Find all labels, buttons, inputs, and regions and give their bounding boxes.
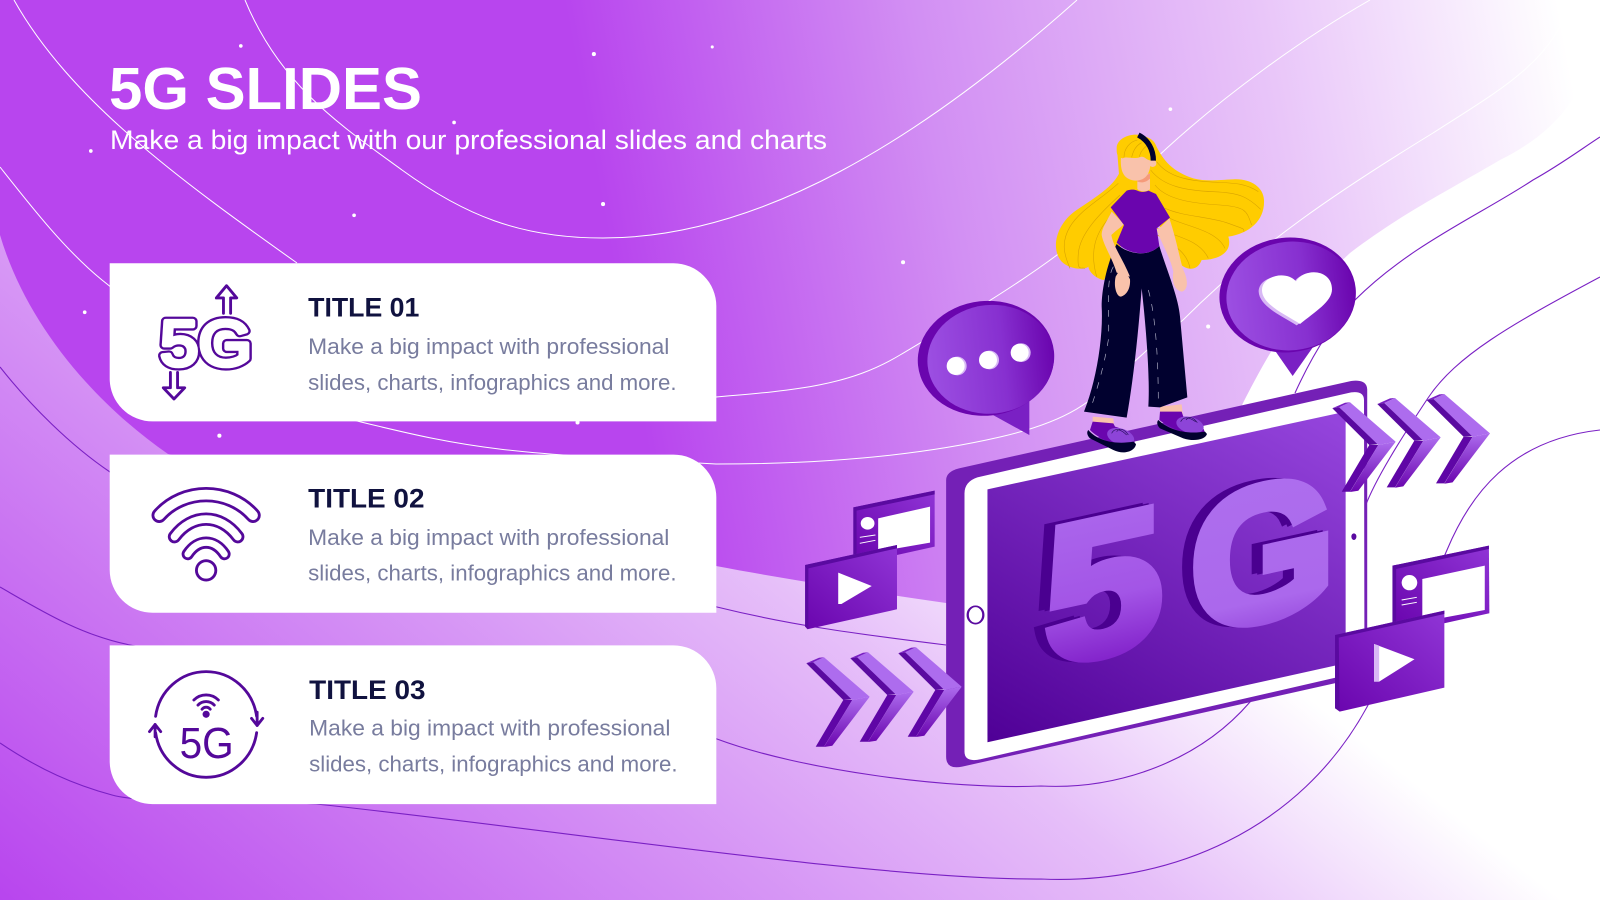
card 01 body text: Make a big impact with professional — [308, 334, 669, 359]
icon: 5G with up and down arrows — [160, 286, 252, 399]
person: long hair — [1056, 136, 1264, 280]
tablet home button — [968, 606, 983, 624]
card 01 body text: slides, charts, infographics and more. — [308, 370, 677, 395]
right back profile card — [1392, 546, 1489, 623]
background: white wave — [1150, 20, 1600, 900]
tablet screen — [987, 412, 1346, 742]
icon: 5G in cycle ring — [149, 672, 263, 777]
person: shirt — [1111, 190, 1170, 253]
arrows: right chevrons — [1332, 394, 1490, 492]
big 3D 5: 5 — [1045, 465, 1162, 708]
background: star dots — [83, 44, 1210, 438]
tablet camera dot — [1351, 533, 1356, 540]
big 3D G: G — [1190, 432, 1335, 675]
card 03 body text: Make a big impact with professional — [309, 716, 670, 741]
big 3D 5: 5 — [1034, 464, 1151, 707]
background: white contour lines — [0, 0, 1570, 464]
card 03 body text: slides, charts, infographics and more. — [309, 751, 678, 776]
tablet body — [946, 381, 1367, 767]
title: 5G SLIDES — [109, 56, 422, 122]
icon: 5G with up and down arrows: 5G — [160, 307, 252, 379]
card 02 body text: Make a big impact with professional — [308, 525, 669, 550]
icon: wifi — [159, 495, 253, 580]
left back profile card — [853, 491, 935, 558]
card 02 body text: slides, charts, infographics and more. — [308, 561, 677, 586]
tablet white bezel — [964, 392, 1364, 760]
person: head and headband — [1117, 135, 1156, 191]
speech bubble: heart — [1214, 231, 1362, 376]
left video card — [805, 545, 897, 629]
panel: card 01 — [110, 263, 716, 421]
subtitle: Make a big impact with our professional slides and charts — [110, 125, 827, 155]
icon: 5G with up and down arrows: 5G — [160, 307, 252, 379]
big 3D G: G — [1179, 431, 1324, 675]
person: arms and hands — [1102, 212, 1187, 297]
person: shoes — [1087, 412, 1207, 452]
background: lower light wave — [0, 235, 1600, 900]
card 02 heading: TITLE 02 — [308, 484, 424, 514]
speech bubble: dots — [912, 294, 1060, 435]
panel: card 02 — [110, 455, 716, 613]
illustration: tablet and video cards — [805, 381, 1489, 767]
card 01 heading: TITLE 01 — [308, 292, 420, 322]
panel: card 03 — [110, 645, 716, 804]
icon: 5G in cycle ring: 5G — [180, 719, 234, 768]
right video card — [1335, 611, 1444, 712]
big 3D 5: 5 — [1040, 464, 1157, 707]
arrows: left chevrons — [806, 647, 962, 747]
illustration: person and speech bubbles — [912, 135, 1362, 452]
card 03 heading: TITLE 03 — [309, 675, 426, 705]
big 3D G: G — [1185, 432, 1329, 675]
person: legs and trousers — [1084, 244, 1187, 425]
